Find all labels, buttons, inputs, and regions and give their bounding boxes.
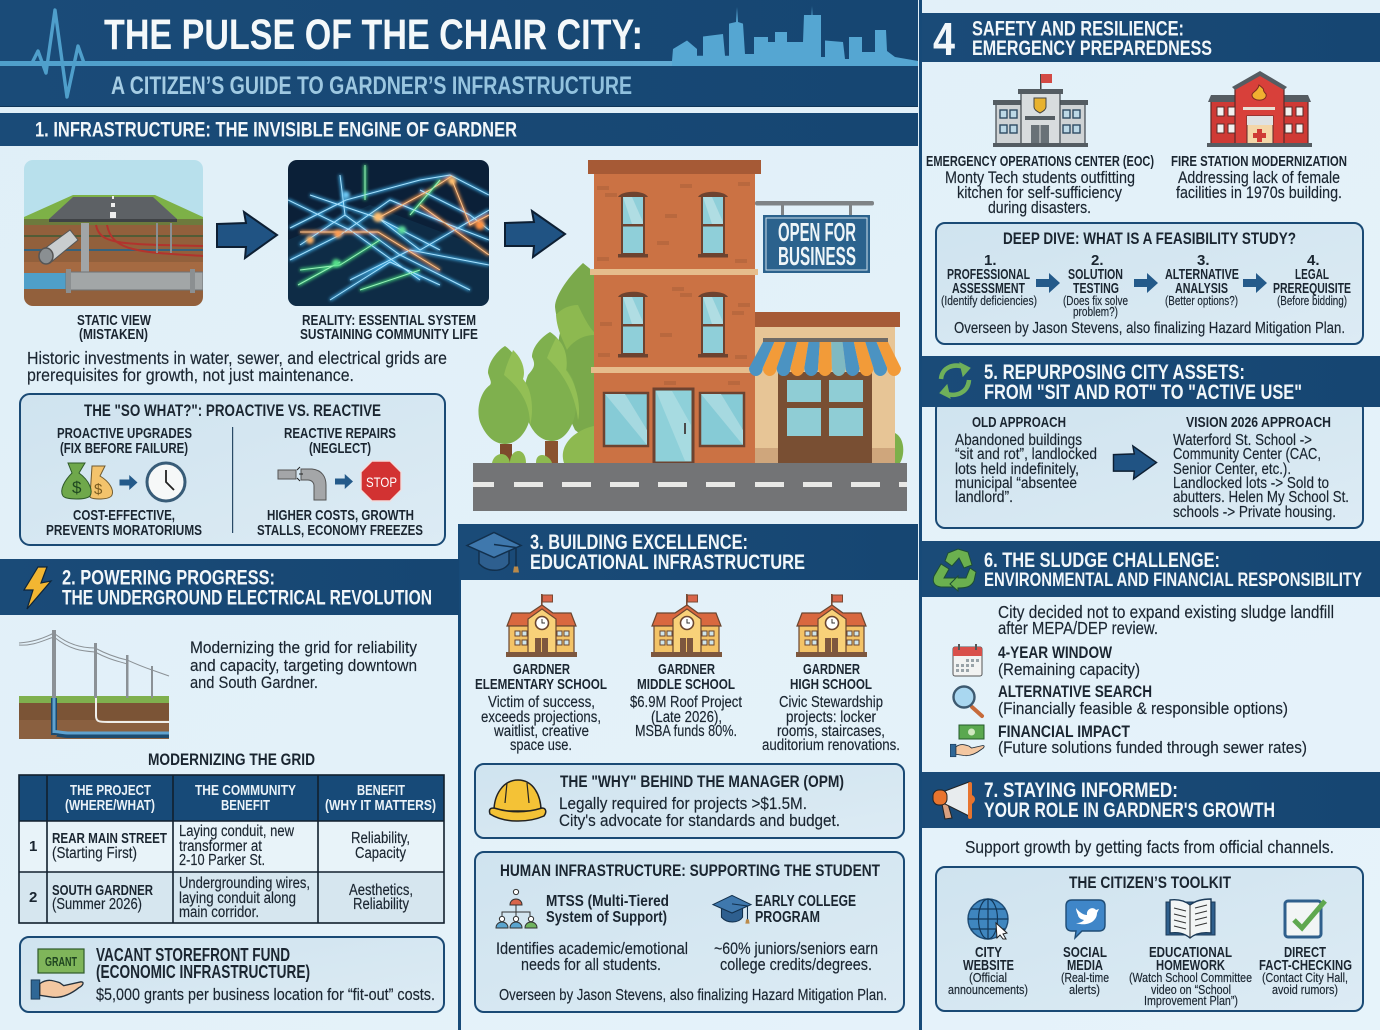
table header: BENEFIT	[221, 797, 270, 814]
proactive column: PREVENTS MORATORIUMS	[46, 522, 202, 539]
old approach: Abandoned buildings	[955, 432, 1082, 449]
text block: modernizing the grid intro: Modernizing the grid for reliability	[190, 638, 417, 657]
arrow: step 1 to 2	[1036, 273, 1060, 293]
text block: support growth: Support growth by getting facts from official channels.	[965, 837, 1334, 857]
icon: checkbox	[1285, 901, 1325, 937]
step 1	[941, 252, 1037, 308]
icon: graduation cap	[467, 532, 521, 572]
heading: section 3: 3. BUILDING EXCELLENCE:	[530, 531, 748, 554]
panel: repurposing body	[936, 400, 1363, 528]
label: reality: SUSTAINING COMMUNITY LIFE	[300, 326, 478, 343]
panel: human infrastructure	[475, 852, 904, 1012]
panel: so what proactive vs reactive: THE "SO WHAT?": PROACTIVE VS. REACTIVE	[84, 401, 381, 420]
step 1: (Identify deficiencies)	[941, 294, 1037, 308]
label: reality: REALITY: ESSENTIAL SYSTEM	[302, 312, 476, 329]
reactive column	[257, 425, 423, 539]
vision approach: Senior Center, etc.).	[1173, 461, 1291, 478]
text block: EOC: EMERGENCY OPERATIONS CENTER (EOC)	[926, 153, 1154, 170]
panel: vacant storefront fund: (ECONOMIC INFRASTRUCTURE)	[96, 962, 310, 982]
awning	[749, 342, 901, 376]
text block: historic investments: Historic investments in water, sewer, and electrical grids are	[27, 348, 447, 368]
proactive column: $	[94, 481, 103, 498]
heading: section 6	[922, 541, 1380, 597]
item: 4-year window: (Remaining capacity)	[998, 660, 1140, 679]
table row 2: Undergrounding wires,	[179, 875, 310, 892]
old approach: lots held indefinitely,	[955, 461, 1079, 478]
tool: city website: (Official	[969, 971, 1007, 985]
icon: magnifier	[954, 686, 982, 716]
icon: globe	[968, 899, 1008, 939]
step 2: TESTING	[1073, 280, 1119, 297]
tool: educational homework: Improvement Plan”)	[1144, 994, 1238, 1008]
icon: emergency operations building	[993, 74, 1088, 147]
subtitle: A CITIZEN’S GUIDE TO GARDNER’S INFRASTRUCTURE	[111, 72, 632, 100]
icon: grant note and hand: GRANT	[45, 954, 77, 969]
proactive column	[46, 425, 202, 539]
vision approach: Waterford St. School ->	[1173, 432, 1312, 449]
table row 2: Aesthetics,	[349, 882, 413, 899]
arrow: reality to storefront	[505, 211, 565, 257]
illustration: underground pipes static view	[24, 160, 203, 306]
ground floor windows and door	[604, 389, 744, 463]
illustration: glowing network reality view	[288, 160, 489, 306]
brick tower	[594, 174, 755, 463]
tool: educational homework: EDUCATIONAL	[1149, 944, 1232, 961]
table row 1: (Starting First)	[52, 845, 137, 862]
icon: hard hat	[489, 780, 546, 821]
icon: org chart	[496, 889, 537, 928]
old approach: landlord”.	[955, 489, 1013, 506]
text block: historic investments	[27, 348, 447, 385]
school: middle: MIDDLE SCHOOL	[637, 676, 735, 693]
heading: section 3: EDUCATIONAL INFRASTRUCTURE	[530, 551, 805, 574]
panel: why behind the manager: Legally required for projects >$1.5M.	[559, 794, 807, 813]
text block: modernizing the grid intro: and South Gardner.	[190, 673, 318, 692]
tool: educational homework: (Watch School Committee	[1129, 971, 1252, 985]
table row 1	[29, 823, 410, 869]
table row 1: Laying conduit, new	[179, 823, 295, 840]
old approach: OLD APPROACH	[972, 414, 1066, 431]
panel: deep dive feasibility study	[936, 223, 1363, 344]
icon: calendar	[953, 644, 982, 676]
school: middle: MSBA funds 80%.	[635, 723, 737, 740]
panel: citizen's toolkit: THE CITIZEN’S TOOLKIT	[1069, 873, 1231, 892]
school: middle: $6.9M Roof Project	[630, 694, 743, 711]
heading: section 1	[0, 113, 918, 146]
panel: vacant storefront fund	[20, 937, 444, 1012]
vision approach: Landlocked lots -> Sold to	[1173, 475, 1329, 492]
tool: social media: (Real-time	[1061, 971, 1109, 985]
text block: EOC: kitchen for self-sufficiency	[957, 184, 1123, 202]
table header: (WHERE/WHAT)	[65, 797, 155, 814]
icon: speech bubble bird	[1066, 900, 1105, 938]
heading: section 4: 4	[933, 13, 955, 65]
heading: section 5	[922, 356, 1380, 407]
heading: section 4: SAFETY AND RESILIENCE:	[972, 18, 1184, 40]
school: high: rooms, staircases,	[777, 723, 885, 740]
vision approach: VISION 2026 APPROACH	[1186, 414, 1331, 431]
item: 4-year window: 4-YEAR WINDOW	[998, 643, 1113, 662]
item: financial impact: FINANCIAL IMPACT	[998, 722, 1131, 741]
label: static view: (MISTAKEN)	[79, 326, 148, 343]
icon: fire station	[1207, 71, 1312, 147]
tool: city website	[948, 899, 1028, 997]
road	[473, 463, 907, 511]
step 1: ASSESSMENT	[952, 280, 1025, 297]
heading: section 3	[460, 524, 918, 580]
heading: section 2: 2. POWERING PROGRESS:	[62, 566, 275, 590]
school: high: GARDNER	[803, 661, 860, 678]
panel: vacant storefront fund: VACANT STOREFRONT FUND	[96, 945, 290, 965]
icon: early college cap	[713, 895, 751, 924]
tool: direct fact-checking: FACT-CHECKING	[1259, 957, 1352, 974]
school: middle	[630, 594, 743, 740]
tool: social media: MEDIA	[1067, 957, 1103, 974]
old approach: “sit and rot”, landlocked	[955, 446, 1097, 463]
tool: educational homework: HOMEWORK	[1156, 957, 1225, 974]
item: alternative search	[954, 682, 1288, 718]
icon: open book	[1166, 899, 1215, 938]
school: elementary	[475, 594, 607, 754]
label: reality	[300, 312, 478, 343]
school: elementary: exceeds projections,	[481, 709, 601, 726]
side shop	[749, 312, 901, 463]
panel: human infrastructure: PROGRAM	[755, 909, 820, 926]
panel: human infrastructure: Identifies academic/emotional	[496, 940, 688, 958]
step 1: PROFESSIONAL	[947, 266, 1030, 283]
proactive column: COST-EFFECTIVE,	[73, 507, 175, 524]
heading: section 7: 7. STAYING INFORMED:	[984, 779, 1178, 802]
heading: section 6: 6. THE SLUDGE CHALLENGE:	[984, 549, 1220, 572]
tool: educational homework	[1129, 899, 1252, 1008]
heading: section 4	[922, 13, 1380, 65]
text block: fire station: Addressing lack of female	[1178, 169, 1340, 187]
panel: human infrastructure: college credits/degrees.	[720, 956, 872, 974]
table header: THE COMMUNITY	[195, 782, 296, 799]
step 4: LEGAL	[1295, 266, 1329, 283]
vision approach: Community Center (CAC,	[1173, 446, 1321, 463]
school: elementary: GARDNER	[513, 661, 570, 678]
panel: human infrastructure: needs for all students.	[521, 956, 661, 974]
tool: social media: SOCIAL	[1063, 944, 1107, 961]
step 3: (Better options?)	[1165, 294, 1238, 308]
arrow: step 3 to 4	[1243, 273, 1267, 293]
text block: sludge intro	[998, 602, 1334, 638]
arrow: static to reality	[217, 212, 277, 258]
step 4: 4.	[1307, 252, 1320, 269]
school: elementary: ELEMENTARY SCHOOL	[475, 676, 607, 693]
text block: modernizing the grid intro: and capacity, targeting downtown	[190, 656, 417, 675]
label: static view: STATIC VIEW	[77, 312, 152, 329]
table: grid projects	[19, 775, 444, 923]
reactive column: REACTIVE REPAIRS	[284, 425, 396, 442]
old approach: municipal “absentee	[955, 475, 1077, 492]
table row 1: 1	[29, 838, 37, 855]
panel: human infrastructure: HUMAN INFRASTRUCTURE: SUPPORTING THE STUDENT	[500, 861, 880, 880]
tool: city website: CITY	[975, 944, 1002, 961]
tool: educational homework: video on “School	[1151, 983, 1231, 997]
text block: historic investments: prerequisites for growth, not just maintenance.	[27, 365, 354, 385]
panel: why behind the manager: THE "WHY" BEHIND THE MANAGER (OPM)	[560, 772, 844, 791]
step 4: (Before bidding)	[1277, 294, 1347, 308]
vision approach: abutters. Helen My School St.	[1173, 489, 1349, 506]
text block: EOC	[926, 153, 1154, 217]
vision approach	[1173, 414, 1349, 521]
reactive column: STALLS, ECONOMY FREEZES	[257, 522, 423, 539]
heading: section 7: YOUR ROLE IN GARDNER'S GROWTH	[984, 799, 1275, 822]
text block: sludge intro: City decided not to expand existing sludge landfill	[998, 602, 1334, 622]
table header	[65, 782, 436, 814]
icon: megaphone	[933, 782, 975, 819]
table header: (WHY IT MATTERS)	[325, 797, 436, 814]
tool: direct fact-checking: (Contact City Hall,	[1262, 971, 1348, 985]
panel: vacant storefront fund: $5,000 grants per business location for “fit-out” costs.	[96, 986, 435, 1004]
sign: OPEN FOR	[778, 217, 856, 247]
table row 2: 2	[29, 889, 37, 906]
table row 2: main corridor.	[179, 904, 259, 921]
panel: citizen's toolkit	[936, 867, 1363, 1011]
heading: section 4: EMERGENCY PREPAREDNESS	[972, 37, 1212, 60]
proactive column: $	[72, 478, 82, 497]
tool: social media	[1061, 900, 1109, 997]
proactive column: PROACTIVE UPGRADES	[57, 425, 192, 442]
table row 2: SOUTH GARDNER	[52, 882, 153, 899]
text block: EOC: during disasters.	[988, 199, 1091, 217]
school: high: auditorium renovations.	[762, 737, 900, 754]
tool: direct fact-checking	[1259, 901, 1352, 997]
illustration: storefront building	[473, 160, 907, 511]
tool: city website: WEBSITE	[963, 957, 1014, 974]
table header: BENEFIT	[357, 782, 405, 799]
heading: section 2	[0, 559, 459, 615]
item: financial impact	[950, 722, 1307, 757]
tool: direct fact-checking: avoid rumors)	[1272, 983, 1338, 997]
school: elementary: space use.	[510, 737, 572, 754]
step 2: problem?)	[1073, 305, 1118, 319]
table row 1: REAR MAIN STREET	[52, 830, 167, 847]
item: alternative search: ALTERNATIVE SEARCH	[998, 682, 1152, 701]
tool: city website: announcements)	[948, 983, 1028, 997]
school: high: HIGH SCHOOL	[790, 676, 872, 693]
arrow: step 2 to 3	[1134, 273, 1158, 293]
table row 2: Reliability	[353, 896, 409, 913]
icon: recycling symbol	[933, 549, 976, 591]
vision approach: schools -> Private housing.	[1173, 504, 1336, 521]
text block: EOC: Monty Tech students outfitting	[945, 169, 1135, 187]
panel: human infrastructure: MTSS (Multi-Tiered	[546, 893, 669, 910]
step 2: 2.	[1091, 252, 1104, 269]
label: static view	[77, 312, 152, 343]
tower windows	[618, 192, 728, 358]
arrow: old to vision	[1113, 446, 1157, 479]
text block: modernizing the grid intro	[190, 638, 417, 692]
icon: green cycle arrows	[940, 363, 970, 398]
column dividers	[458, 0, 922, 1030]
school: middle: (Late 2026),	[651, 709, 722, 726]
main title: THE PULSE OF THE CHAIR CITY:	[104, 11, 643, 59]
step 4	[1273, 252, 1351, 308]
heading: section 7	[922, 772, 1380, 828]
panel: human infrastructure: System of Support)	[546, 909, 667, 926]
school: elementary: Victim of success,	[488, 694, 595, 711]
reactive column: HIGHER COSTS, GROWTH	[267, 507, 414, 524]
item: alternative search: (Financially feasible & responsible options)	[998, 699, 1288, 718]
panel: human infrastructure: Overseen by Jason Stevens, also finalizing Hazard Mitigation Plan.	[499, 987, 887, 1004]
step 3: 3.	[1197, 252, 1210, 269]
step 2: (Does fix solve	[1063, 294, 1128, 308]
panel: deep dive feasibility study: DEEP DIVE: WHAT IS A FEASIBILITY STUDY?	[1003, 229, 1296, 248]
school: elementary: waitlist, creative	[493, 723, 589, 740]
heading: modernizing the grid: MODERNIZING THE GRID	[148, 750, 315, 769]
panel: human infrastructure: EARLY COLLEGE	[755, 893, 856, 910]
table header: THE PROJECT	[70, 782, 151, 799]
heading: section 2: THE UNDERGROUND ELECTRICAL REVOLUTION	[62, 586, 432, 610]
heading: section 1: 1. INFRASTRUCTURE: THE INVISIBLE ENGINE OF GARDNER	[35, 118, 517, 142]
item: financial impact: (Future solutions funded through sewer rates)	[998, 738, 1307, 757]
heading: section 5: 5. REPURPOSING CITY ASSETS:	[984, 361, 1245, 384]
table row 2	[29, 875, 413, 921]
trees	[478, 263, 903, 463]
school: high: Civic Stewardship	[779, 694, 883, 711]
sign	[755, 201, 874, 273]
panel: so what proactive vs reactive	[20, 394, 445, 545]
icon: lightning bolt	[24, 567, 51, 609]
table row 1: 2-10 Parker St.	[179, 852, 265, 869]
table row 2: (Summer 2026)	[52, 896, 142, 913]
step 2: SOLUTION	[1068, 266, 1123, 283]
step 1: 1.	[984, 252, 997, 269]
reactive column: (NEGLECT)	[309, 440, 371, 457]
old approach	[955, 414, 1097, 506]
heading: section 5: FROM "SIT AND ROT" TO "ACTIVE USE"	[984, 381, 1302, 404]
tool: social media: alerts)	[1069, 983, 1100, 997]
school: middle: GARDNER	[658, 661, 715, 678]
reactive column: STOP	[366, 474, 397, 490]
table row 1: transformer at	[179, 838, 263, 855]
step 3	[1165, 252, 1239, 308]
step 3: ANALYSIS	[1175, 280, 1228, 297]
text block: fire station: facilities in 1970s building.	[1176, 184, 1342, 202]
panel: why behind the manager: City's advocate for standards and budget.	[559, 811, 840, 830]
step 2	[1063, 252, 1128, 319]
school: high: projects: locker	[786, 709, 876, 726]
icon: cash and hand	[950, 725, 984, 757]
text block: sludge intro: after MEPA/DEP review.	[998, 618, 1158, 638]
table row 1: Reliability,	[351, 830, 410, 847]
item: 4-year window	[953, 643, 1140, 679]
step 3: ALTERNATIVE	[1165, 266, 1239, 283]
panel: why behind the manager	[475, 764, 904, 838]
title banner	[0, 0, 918, 107]
illustration: poles and underground lines	[19, 630, 169, 739]
table row 1: Capacity	[355, 845, 406, 862]
table row 2: laying conduit along	[179, 890, 296, 907]
icon: city skyline	[672, 6, 918, 66]
tool: direct fact-checking: DIRECT	[1284, 944, 1326, 961]
sign: BUSINESS	[778, 241, 856, 271]
icon: grant note and hand	[31, 949, 84, 999]
panel: human infrastructure: ~60% juniors/seniors earn	[714, 940, 878, 958]
school: high	[762, 594, 900, 754]
text block: fire station	[1171, 153, 1347, 202]
icon: heartbeat pulse line	[0, 10, 100, 97]
proactive column: (FIX BEFORE FAILURE)	[60, 440, 188, 457]
